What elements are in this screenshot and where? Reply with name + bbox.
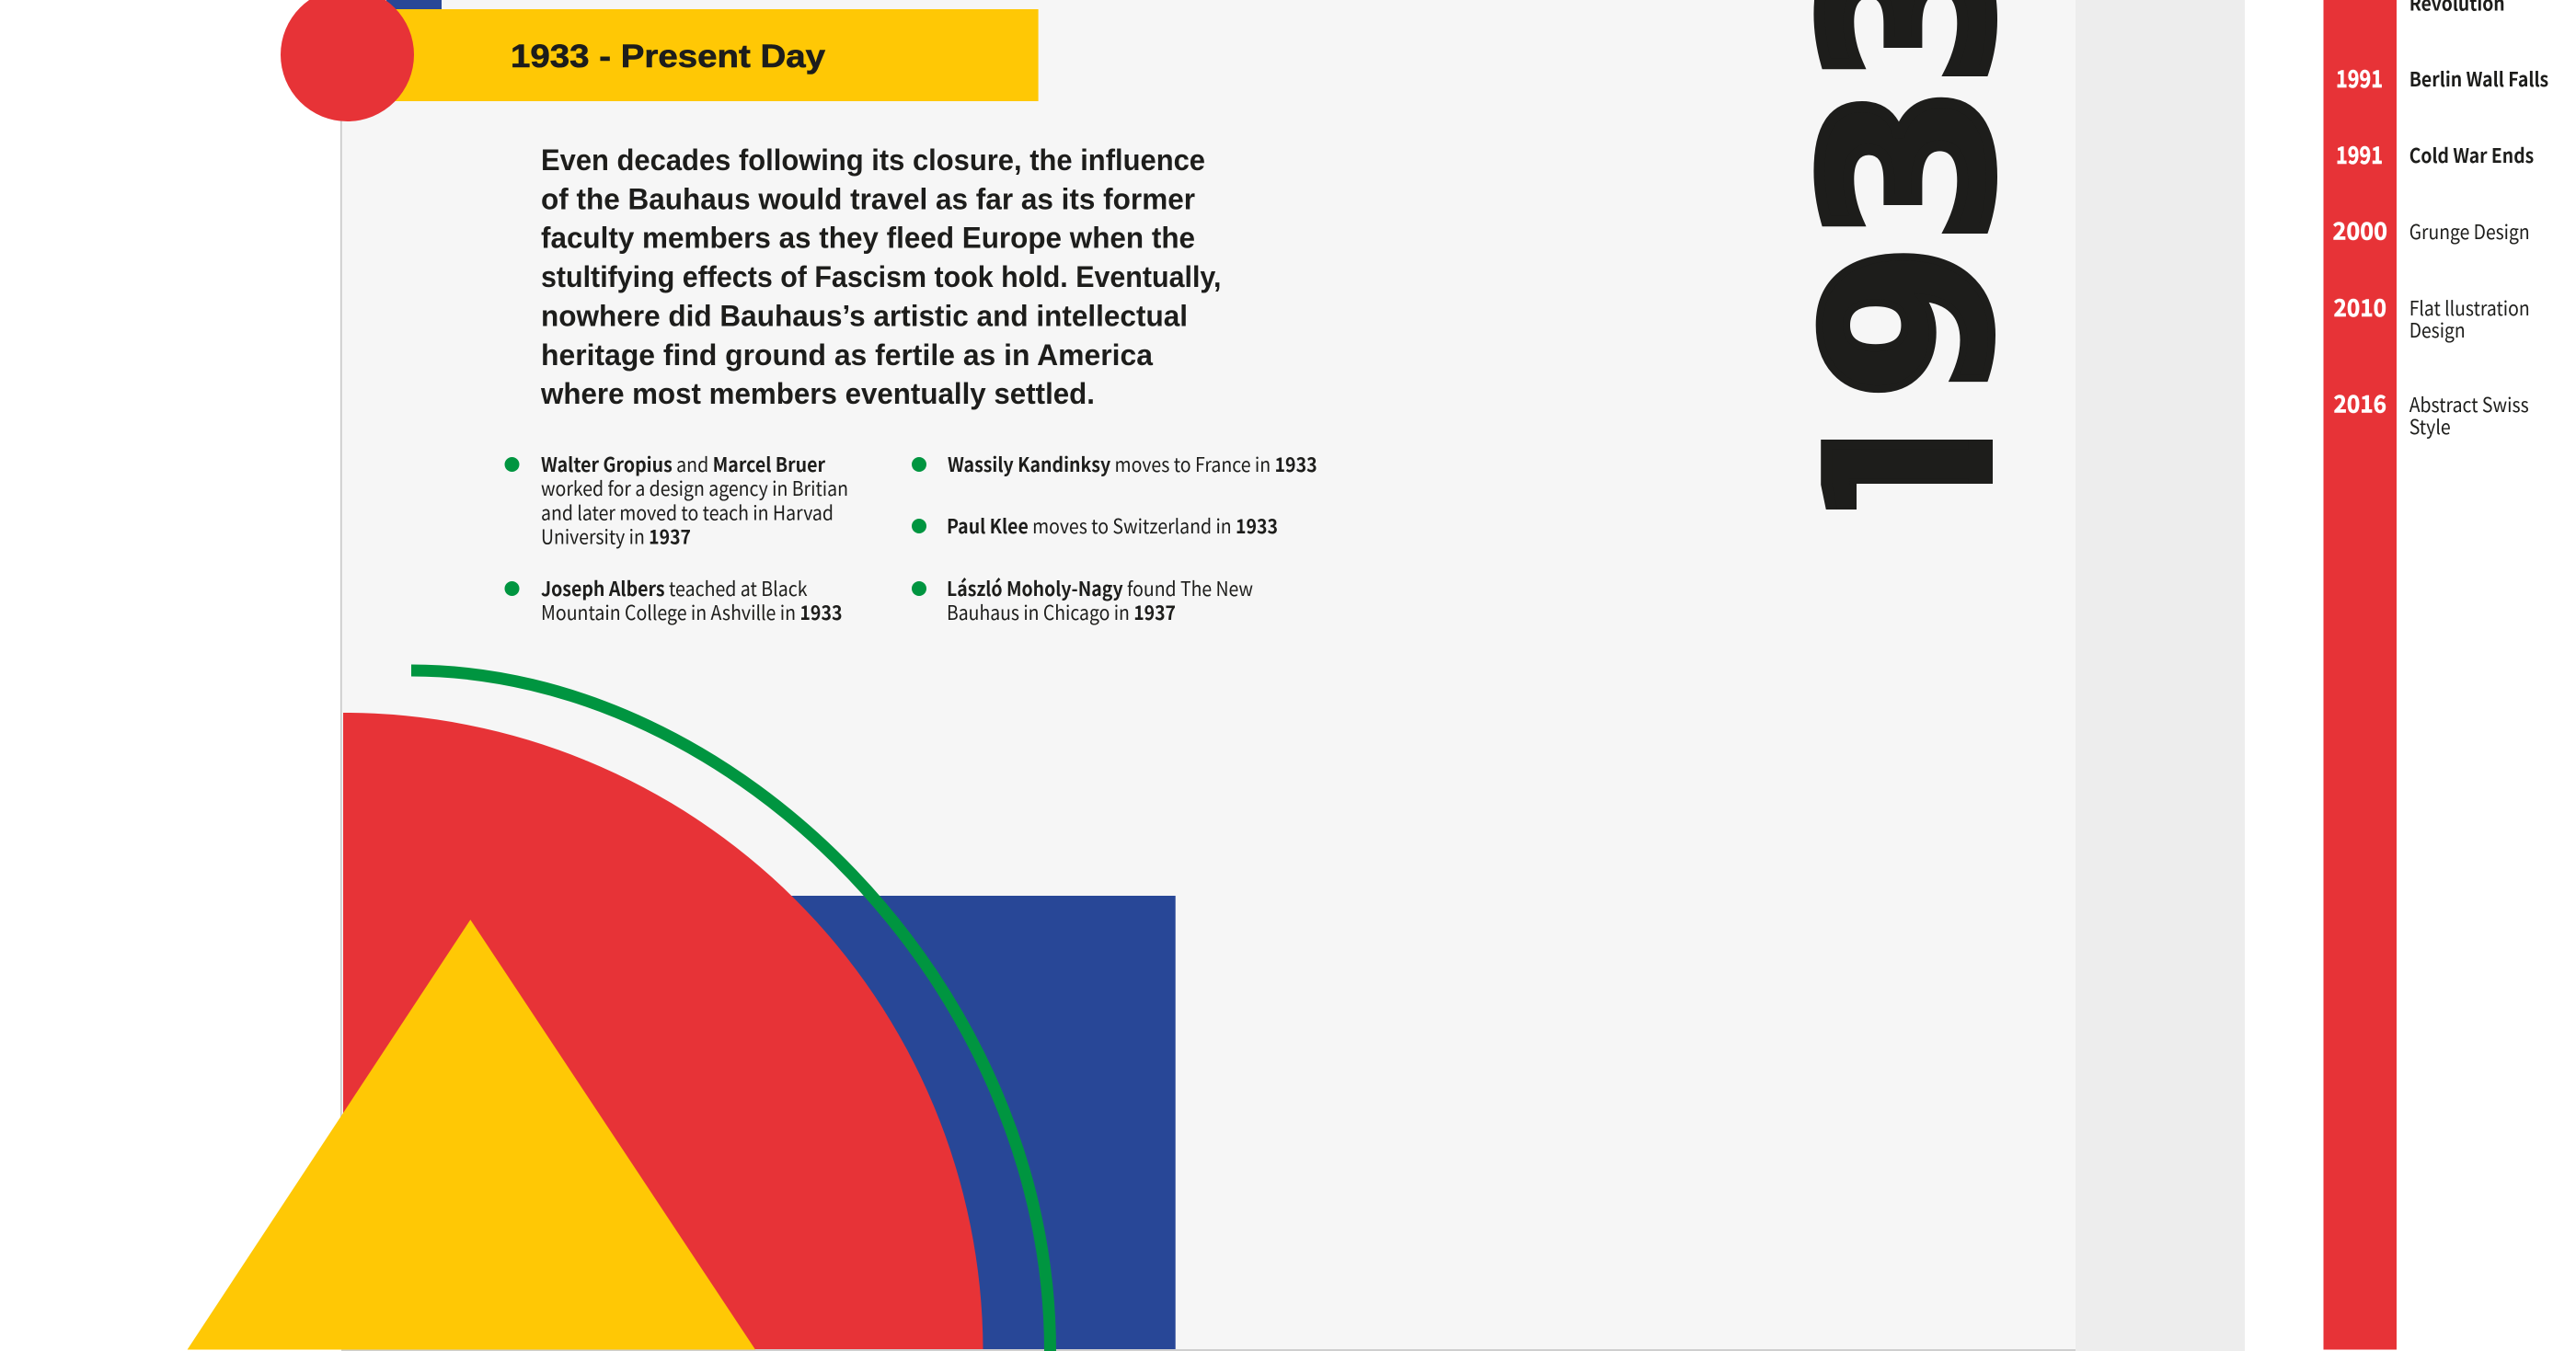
digit 3: 3 — [1777, 85, 2042, 244]
timeline entry: 2016 Abstract Swiss — [2333, 386, 2529, 441]
green arc — [411, 670, 1051, 1351]
timeline entry: 1991 Berlin Wall — [2336, 61, 2548, 95]
digit 9: 9 — [1777, 242, 2042, 401]
timeline entry: 1991 Cold War: Cold War Ends — [2409, 141, 2534, 169]
timeline entry: 2010 Flat Illustration: Flat llustration — [2409, 293, 2530, 322]
bullet: Albers: Joseph Albers teached at Black — [541, 574, 808, 602]
bullet: Albers: Mountain College in Ashville in 1933 — [541, 598, 843, 626]
red circle marker — [281, 0, 414, 121]
timeline entry: 1991 Cold War — [2336, 137, 2534, 171]
bullet: Klee: Paul Klee moves to Switzerland in 1933 — [947, 511, 1278, 540]
intro paragraph: faculty members as they fleed Europe when the — [541, 222, 1195, 255]
bullet: Gropius and Breuer — [504, 450, 848, 551]
blue square — [644, 896, 1176, 1349]
timeline entry: 2016 Abstract Swiss: 2016 — [2333, 386, 2386, 419]
timeline entry: 1991 Berlin Wall: 1991 — [2336, 61, 2383, 95]
yellow triangle — [188, 920, 755, 1350]
intro paragraph: heritage find ground as fertile as in America — [541, 338, 1153, 372]
bullet list: left column — [504, 450, 848, 626]
bullet: Gropius and Breuer: and later moved to teach in Harvad — [541, 498, 834, 526]
timeline entry: 2010 Flat Illustration: Design — [2409, 315, 2466, 344]
panel left rule — [340, 120, 342, 1349]
bullet: Moholy-Nagy: László Moholy-Nagy found The New — [947, 574, 1253, 602]
timeline bar — [2324, 0, 2397, 1350]
large vertical year 1933 — [1813, 0, 1997, 509]
bullet: Gropius and Breuer: worked for a design agency in Britian — [541, 474, 848, 502]
blue tab above banner — [386, 0, 442, 9]
panel: light background — [341, 0, 2076, 1351]
timeline entry: 2010 Flat Illustration — [2333, 290, 2530, 344]
bullet: Albers — [504, 574, 843, 626]
bullet: Gropius and Breuer: University in 1937 — [541, 522, 691, 551]
bullet: Gropius and Breuer: Walter Gropius and Marcel Bruer — [541, 450, 826, 478]
bullet list: right column — [912, 450, 1317, 626]
intro paragraph: of the Bauhaus would travel as far as its former — [541, 182, 1195, 215]
intro paragraph: Even decades following its closure, the influence — [541, 143, 1205, 177]
intro paragraph — [540, 143, 1222, 410]
timeline entry: 2000 Grunge: 2000 — [2333, 213, 2387, 246]
heading banner — [386, 9, 1039, 101]
timeline labels — [2333, 0, 2548, 441]
timeline entry: 2016 Abstract Swiss: Abstract Swiss — [2409, 390, 2529, 418]
digit 1: 1 — [1782, 390, 2047, 548]
panel: right grey band — [2076, 0, 2245, 1351]
red quarter circle — [343, 713, 983, 1349]
intro paragraph: stultifying effects of Fascism took hold. Eventually, — [541, 260, 1222, 293]
intro paragraph: where most members eventually settled. — [540, 377, 1095, 410]
bullet: Moholy-Nagy — [912, 574, 1253, 626]
timeline entry: 2000 Grunge — [2333, 213, 2530, 246]
intro paragraph: nowhere did Bauhaus’s artistic and intellectual — [541, 300, 1188, 333]
timeline entry: 2016 Abstract Swiss: Style — [2409, 412, 2451, 441]
bullet: Kandinsky: Wassily Kandinksy moves to France in 1933 — [948, 450, 1317, 478]
timeline entry: 1991 Berlin Wall: Berlin Wall Falls — [2409, 64, 2548, 93]
panel bottom rule — [341, 1349, 2076, 1351]
timeline entry: 2010 Flat Illustration: 2010 — [2333, 290, 2386, 324]
heading: 1933 - Present Day — [511, 39, 826, 74]
timeline entry: 2000 Grunge: Grunge Design — [2409, 217, 2530, 246]
geometric composition — [188, 670, 1176, 1351]
timeline entry: 1991 Cold War: 1991 — [2336, 137, 2383, 171]
bullet: Moholy-Nagy: Bauhaus in Chicago in 1937 — [947, 598, 1176, 626]
